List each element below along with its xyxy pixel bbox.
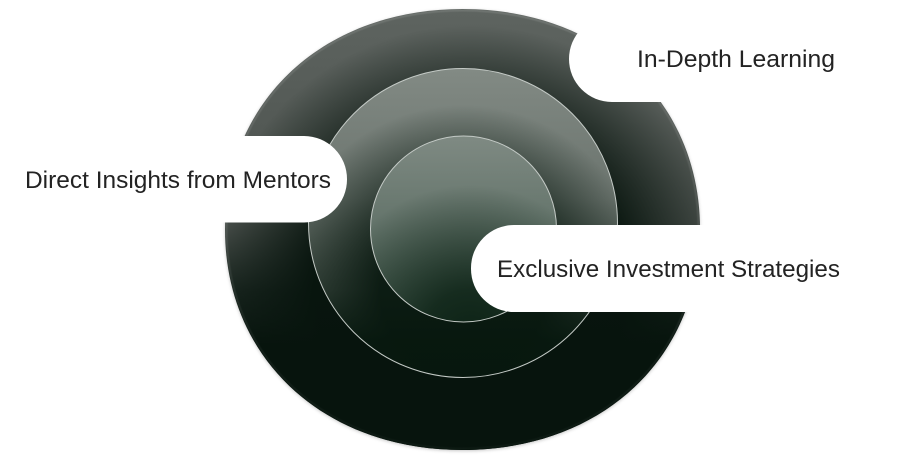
label: In-Depth Learning [569,16,915,102]
label: Direct Insights from Mentors: Direct Insights from Mentors [25,167,331,194]
middle circle [308,68,618,378]
outer circle [225,9,700,450]
label: Exclusive Investment Strategies: Exclusive Investment Strategies [497,256,840,283]
label: In-Depth Learning: In-Depth Learning [637,46,835,73]
label: Direct Insights from Mentors [0,136,347,222]
inner circle [370,136,556,322]
label: Exclusive Investment Strategies [471,225,915,312]
